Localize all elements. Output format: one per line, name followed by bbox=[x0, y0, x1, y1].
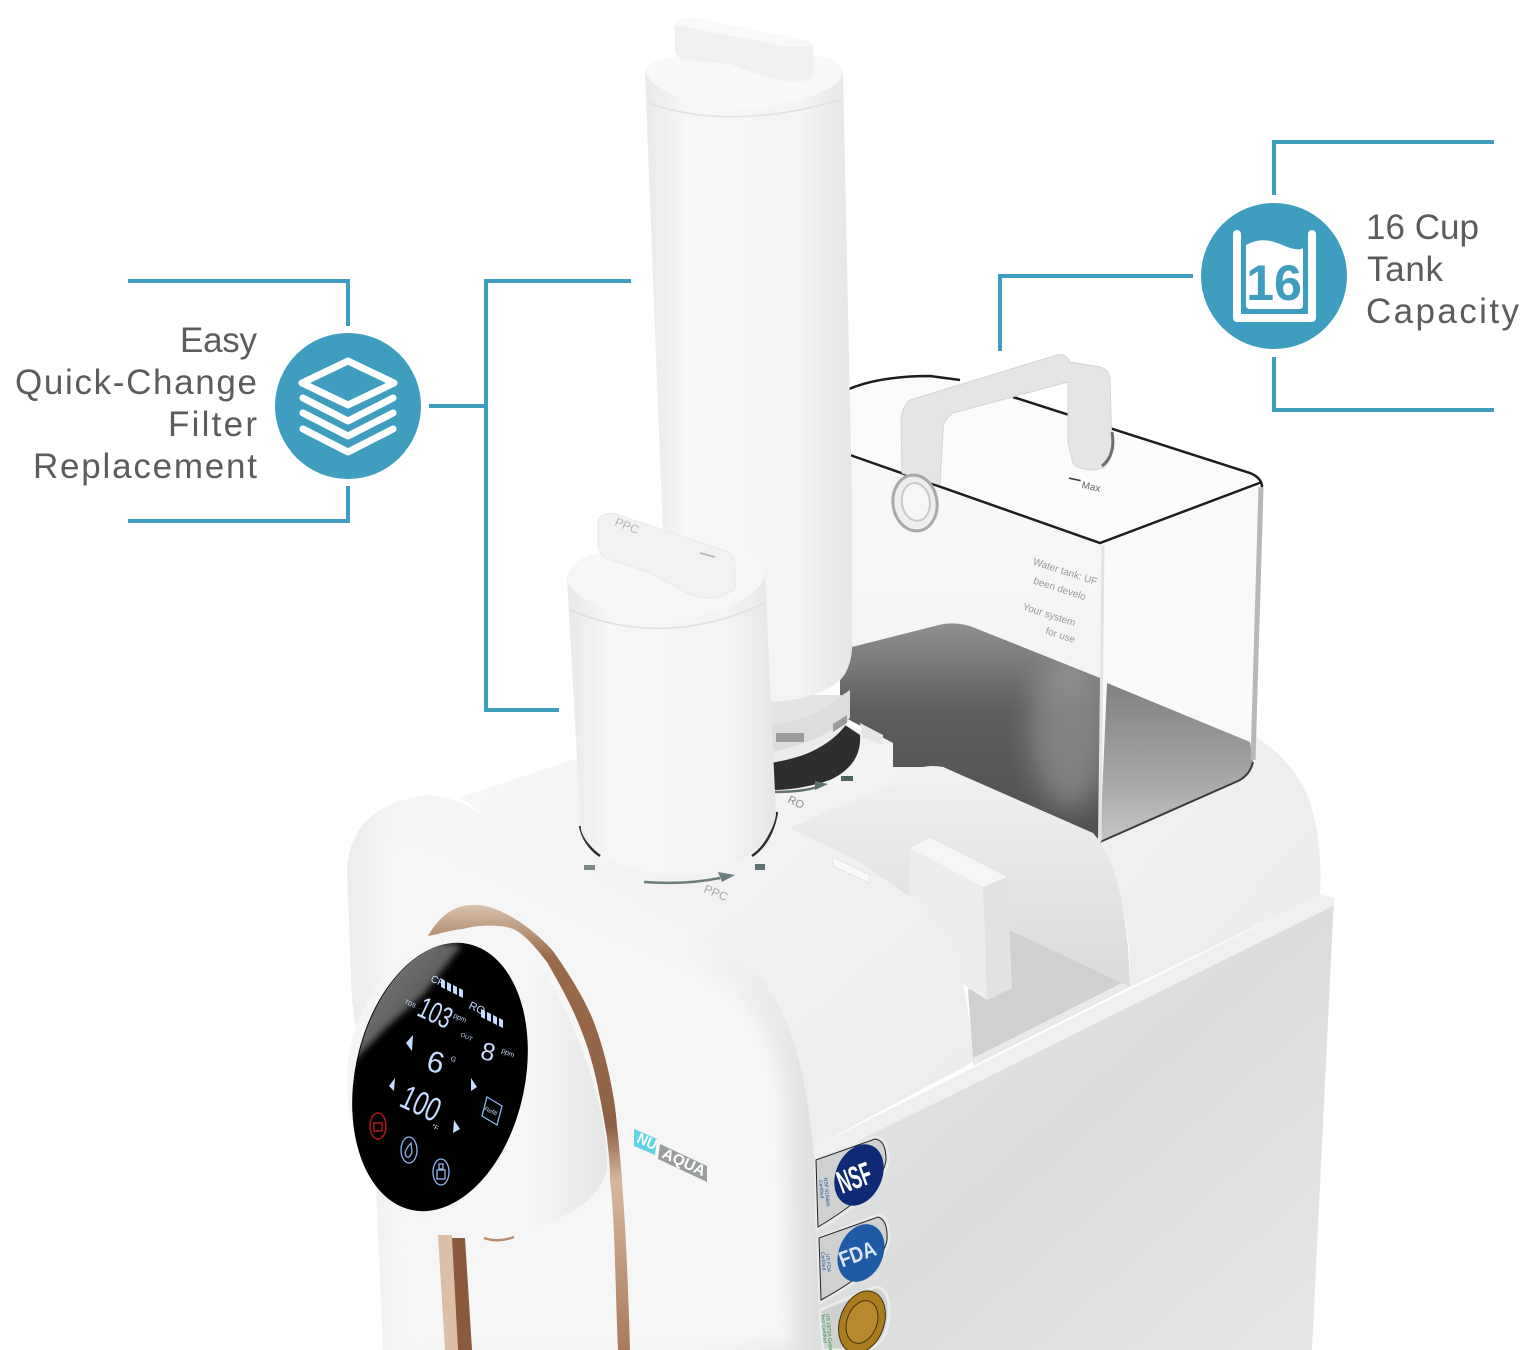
icon: tank with 16 cups: 16 bbox=[1246, 255, 1302, 311]
heading: 16 cup tank capacity: 16 Cup bbox=[1366, 208, 1479, 247]
tank printed instructions: been develo bbox=[1032, 576, 1088, 603]
screen glare bbox=[358, 943, 464, 1064]
tank floor reflection bbox=[1030, 650, 1110, 810]
dial housing bbox=[347, 930, 607, 1237]
divider block top bbox=[910, 838, 1007, 887]
dark socket bbox=[773, 725, 860, 790]
rear clip bbox=[860, 723, 883, 745]
heading: 16 cup tank capacity bbox=[1366, 208, 1520, 331]
lock button bbox=[370, 1113, 386, 1139]
status readouts: 103 bbox=[413, 991, 457, 1036]
front panel bbox=[347, 795, 820, 1350]
cavity between deck and tank bbox=[790, 767, 1130, 1066]
heading: 16 cup tank capacity: Capacity bbox=[1366, 292, 1520, 331]
status readouts: 6 bbox=[423, 1045, 448, 1081]
PPC filter bbox=[567, 513, 777, 875]
FDA sticker bbox=[818, 1215, 893, 1302]
max fill mark bbox=[1067, 477, 1101, 495]
max fill mark: Max bbox=[1081, 480, 1101, 495]
menu button bbox=[482, 1097, 502, 1125]
filter handle top bbox=[675, 17, 813, 47]
tank printed instructions bbox=[1012, 557, 1098, 647]
status readouts: ppm bbox=[500, 1047, 516, 1060]
tank bottom edge bbox=[1100, 762, 1253, 842]
collar slots bbox=[776, 715, 847, 742]
NSF sticker bbox=[815, 1136, 893, 1230]
filter twist markings: RO bbox=[786, 794, 806, 812]
status readouts: G bbox=[449, 1055, 457, 1064]
collar lower band bbox=[770, 705, 848, 763]
icon: stacked filter layers bbox=[275, 333, 421, 479]
filter body bbox=[567, 543, 776, 875]
brand logo: AQUA bbox=[659, 1145, 708, 1180]
status readouts: °F bbox=[430, 1123, 440, 1133]
water button bbox=[401, 1137, 417, 1163]
gold seal sticker bbox=[819, 1284, 894, 1350]
status readouts: TDS bbox=[403, 999, 417, 1010]
RO level bars bbox=[481, 1009, 503, 1028]
tank corner edge bbox=[1100, 545, 1103, 842]
side panel top lip bbox=[812, 895, 1334, 1162]
copper trim arc bbox=[428, 905, 630, 1350]
menu button: Refill bbox=[483, 1106, 498, 1117]
divider block side bbox=[983, 877, 1012, 1000]
status readouts bbox=[394, 974, 516, 1133]
brand logo: NU bbox=[634, 1130, 660, 1154]
front panel inner highlight bbox=[392, 841, 790, 1345]
tank floor left bbox=[840, 623, 1100, 842]
heading: 16 cup tank capacity: Tank bbox=[1367, 250, 1444, 289]
heading: easy quick-change filter replacement: Easy bbox=[180, 321, 258, 360]
divider block face bbox=[908, 848, 987, 1000]
CF level bars bbox=[441, 979, 463, 998]
status readouts: 100 bbox=[394, 1078, 447, 1130]
filter cap top bbox=[645, 55, 843, 108]
certification stickers bbox=[815, 1136, 894, 1350]
touch screen bbox=[329, 926, 551, 1228]
heading: easy quick-change filter replacement: Filter bbox=[168, 405, 257, 444]
bottle button bbox=[433, 1159, 449, 1185]
tank rim outline bbox=[849, 376, 1262, 543]
FDA sticker: US FDA bbox=[824, 1254, 832, 1273]
collar ring bbox=[770, 690, 850, 752]
handle pivot ring bbox=[889, 472, 941, 534]
spout base bbox=[484, 1237, 514, 1240]
product: water purifier bbox=[329, 17, 1334, 1350]
cavity floor bbox=[968, 930, 1122, 1060]
NSF sticker: NSF bbox=[832, 1155, 876, 1200]
brand logo bbox=[634, 1129, 708, 1182]
copper trim lower bbox=[438, 1235, 472, 1350]
top deck bbox=[460, 695, 973, 1148]
heading: easy quick-change filter replacement bbox=[15, 321, 258, 486]
gold seal sticker: Test Certified bbox=[819, 1314, 828, 1343]
filter twist markings bbox=[584, 776, 853, 904]
filter body bbox=[645, 55, 852, 702]
tank right edge bbox=[1253, 487, 1261, 760]
water tank bbox=[840, 355, 1262, 842]
status readouts: 8 bbox=[478, 1037, 498, 1068]
filter handle bbox=[675, 17, 813, 82]
status readouts: RO bbox=[467, 1000, 487, 1018]
tank right face bbox=[1100, 484, 1262, 842]
socket edge bbox=[580, 812, 777, 856]
side panel bbox=[812, 895, 1334, 1350]
control dial bbox=[347, 942, 607, 1242]
filter handle bbox=[598, 513, 735, 598]
NSF sticker: NSF 61/58/A bbox=[822, 1178, 831, 1207]
status readouts: OUT bbox=[459, 1032, 473, 1043]
handle far pivot bbox=[1102, 432, 1113, 466]
rear housing under tank bbox=[1090, 735, 1320, 987]
NSF sticker: Certified bbox=[817, 1180, 825, 1199]
tank left face bbox=[850, 455, 1103, 842]
status readouts: CF bbox=[429, 974, 445, 989]
filter seam bbox=[648, 100, 840, 117]
filter twist markings: PPC bbox=[702, 882, 730, 904]
deck clip tab bbox=[833, 857, 870, 883]
filter seam bbox=[570, 603, 765, 628]
icon: tank with 16 cups bbox=[1201, 203, 1347, 349]
tank floor right bbox=[1100, 683, 1253, 842]
tall RO filter bbox=[645, 17, 852, 702]
cap top bbox=[567, 543, 765, 618]
tank printed instructions: Your system bbox=[1021, 602, 1077, 629]
tank handle bbox=[901, 355, 1112, 485]
handle mark bbox=[700, 553, 715, 557]
FDA sticker: Certified bbox=[819, 1252, 827, 1271]
tank printed instructions: for use bbox=[1044, 626, 1077, 646]
left callout connector lines bbox=[128, 281, 631, 710]
tank printed instructions: Water tank: UF bbox=[1031, 557, 1098, 588]
tank back wall bbox=[849, 376, 1262, 543]
heading: easy quick-change filter replacement: Quick-Change bbox=[15, 363, 257, 402]
right callout connector lines bbox=[1000, 142, 1494, 410]
heading: easy quick-change filter replacement: Replacement bbox=[33, 447, 257, 486]
handle PPC label: PPC bbox=[613, 515, 641, 537]
status readouts: ppm bbox=[452, 1012, 468, 1025]
FDA sticker: FDA bbox=[835, 1236, 880, 1272]
collar upper band bbox=[770, 695, 842, 725]
cavity back wall bbox=[790, 767, 1130, 987]
filter collar bbox=[770, 690, 860, 790]
temperature arrows bbox=[389, 1035, 477, 1133]
cavity floor lip bbox=[973, 983, 1130, 1066]
